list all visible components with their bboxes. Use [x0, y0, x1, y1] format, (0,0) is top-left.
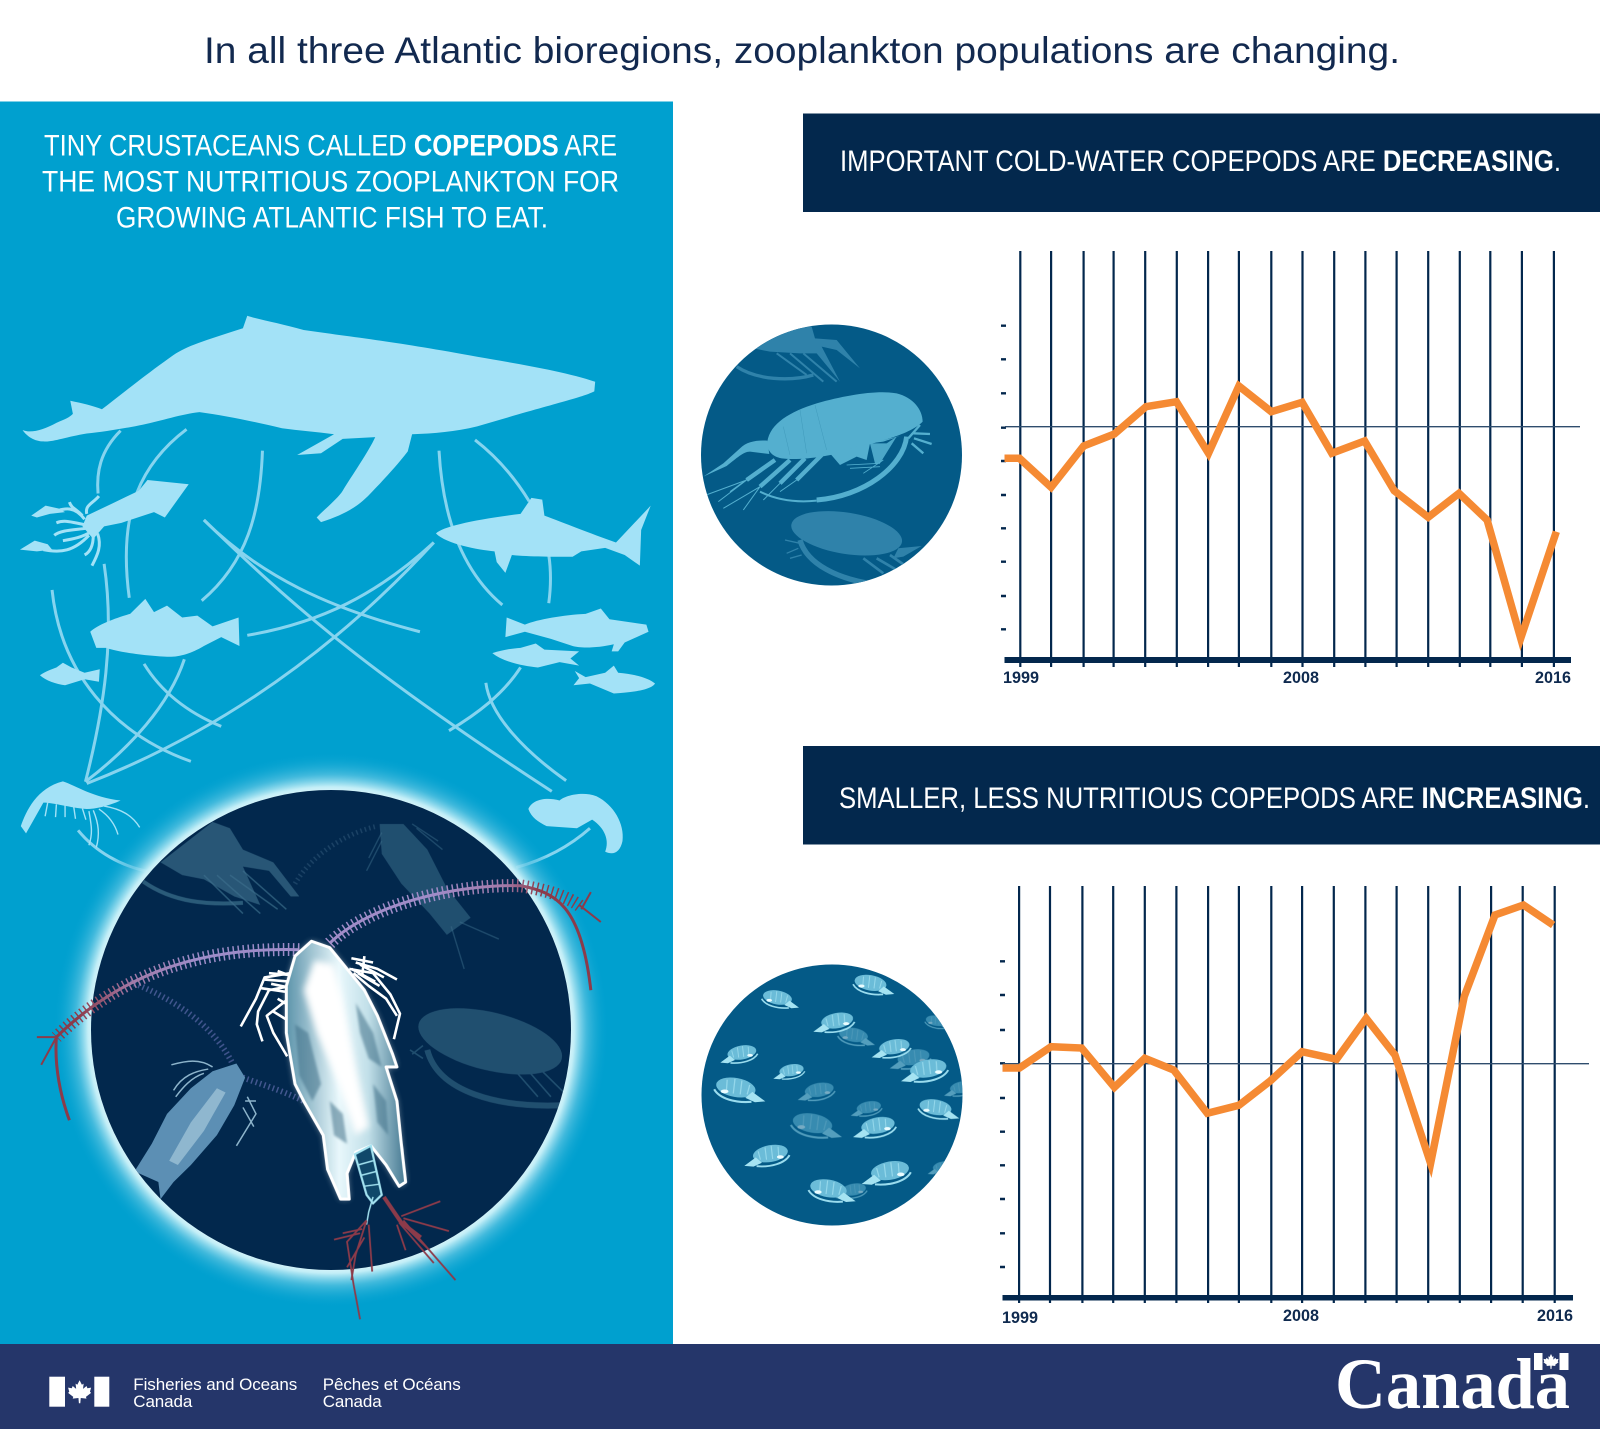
faint copepods: [791, 1014, 975, 1199]
faded copepod top: [737, 327, 860, 382]
icon: fish group right: [492, 609, 655, 694]
panel: copepods food web: [0, 102, 673, 1344]
banner: smaller copepods increasing: SMALLER, LESS NUTRITIOUS COPEPODS ARE INCREASING.: [839, 782, 1590, 815]
body: [286, 941, 406, 1199]
panel heading: [42, 130, 619, 234]
year labels: 2016: [1537, 1306, 1573, 1325]
faded background copepods: [130, 822, 569, 1199]
faded copepod bottom: [785, 511, 922, 584]
grid lines: [1020, 251, 1554, 667]
banner: smaller copepods increasing: [803, 746, 1600, 844]
chart: decreasing copepods: [1001, 251, 1580, 687]
icon: large copepod circle: [701, 324, 962, 586]
icon: shark: [436, 498, 651, 573]
department name English: Canada: [133, 1392, 193, 1411]
year labels: 2008: [1283, 1306, 1319, 1325]
y axis ticks: [1000, 961, 1005, 1267]
banner: cold-water copepods decreasing: [803, 114, 1600, 212]
grid lines: [1019, 886, 1555, 1303]
year labels: 2008: [1283, 668, 1319, 687]
tail setae: [334, 1197, 455, 1319]
mean line: [1003, 1063, 1589, 1065]
panel heading: TINY CRUSTACEANS CALLED COPEPODS ARE: [44, 130, 617, 162]
department name French: Pêches et Océans: [323, 1375, 461, 1394]
bright copepods: [762, 988, 799, 1008]
data line: [1002, 905, 1553, 1163]
icon: Canadian flag signature: [49, 1377, 109, 1407]
y axis ticks: [1001, 326, 1006, 629]
year labels: 1999: [1002, 1308, 1038, 1327]
antennae: [37, 886, 601, 1120]
panel heading: GROWING ATLANTIC FISH TO EAT.: [116, 202, 548, 234]
chart: increasing copepods: [1000, 886, 1589, 1327]
data line: [1004, 386, 1556, 638]
glow around circle: [53, 752, 609, 1308]
main copepod body: [703, 392, 923, 477]
legs: [241, 956, 400, 1056]
department name English: Fisheries and Oceans: [133, 1375, 297, 1394]
department name French: Canada: [323, 1392, 382, 1411]
x axis: [1002, 1295, 1573, 1300]
tail segments: [355, 1146, 382, 1203]
lower arcs: [78, 828, 590, 872]
title: In all three Atlantic bioregions, zooplankton populations are changing.: [204, 30, 1400, 71]
year labels: 2016: [1535, 668, 1571, 687]
year labels: [1002, 1306, 1573, 1327]
department name English: [133, 1375, 297, 1411]
food web links: [52, 429, 566, 791]
icon: shrimp: [21, 781, 140, 847]
banner: cold-water copepods decreasing: IMPORTANT COLD-WATER COPEPODS ARE DECREASING.: [840, 145, 1561, 178]
icon: small fish left: [40, 663, 100, 685]
icon: cod: [90, 599, 239, 657]
main copepod: [37, 886, 601, 1319]
x axis: [1004, 657, 1571, 663]
mean line: [1005, 426, 1580, 428]
footer band: [0, 1344, 1600, 1429]
circle: copepods under the microscope: [37, 790, 601, 1319]
panel heading: THE MOST NUTRITIOUS ZOOPLANKTON FOR: [42, 166, 619, 198]
year labels: 1999: [1003, 668, 1039, 687]
department name French: [323, 1375, 461, 1411]
legs and antenna: [703, 425, 932, 510]
Canada wordmark: Canada: [1335, 1344, 1570, 1424]
icon: small copepods circle: [702, 964, 975, 1226]
icon: krill: [528, 794, 623, 853]
icon: squid: [20, 480, 189, 566]
year labels: [1003, 668, 1571, 687]
icon: humpback whale: [23, 316, 595, 522]
